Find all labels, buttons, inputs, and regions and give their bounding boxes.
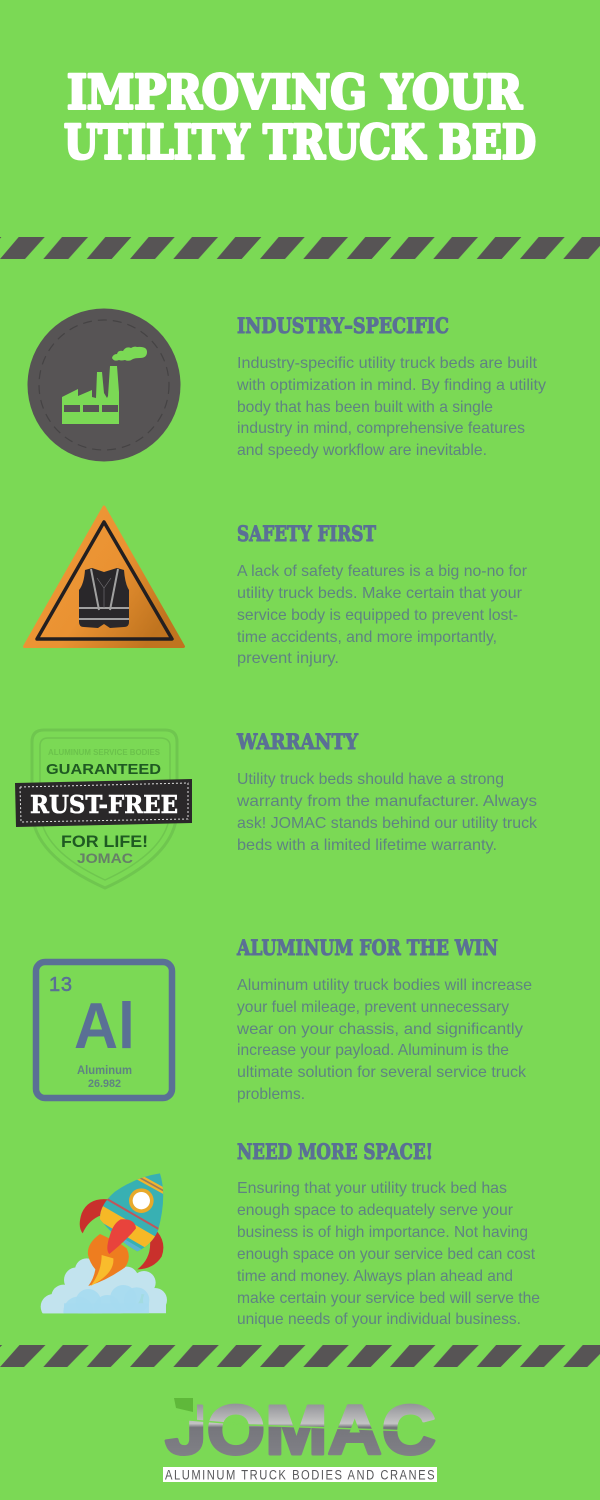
- icon: rust-free guarantee badge: RUST-FREE: [30, 790, 178, 819]
- icon: rust-free guarantee badge: [15, 730, 192, 888]
- heading: warranty: WARRANTY: [236, 729, 359, 754]
- icon: aluminum periodic table tile: Al: [74, 989, 135, 1062]
- text: safety first: time accidents, and more importantly,: [237, 629, 497, 646]
- logo: JOMAC: JOMAC: [165, 1391, 436, 1469]
- text: aluminum: increase your payload. Aluminum is the: [237, 1042, 509, 1059]
- text: warranty: Utility truck beds should have a strong: [237, 771, 504, 788]
- icon: safety vest warning triangle: [24, 507, 184, 646]
- icon: aluminum periodic table tile: [36, 962, 172, 1098]
- text: industry-specific: industry in mind, comprehensive features: [237, 420, 525, 437]
- text: aluminum: Aluminum utility truck bodies will increase: [237, 977, 532, 994]
- icon: rust-free guarantee badge: GUARANTEED: [46, 761, 161, 778]
- heading: industry-specific: INDUSTRY–SPECIFIC: [237, 313, 449, 338]
- text: warranty: beds with a limited lifetime warranty.: [237, 837, 497, 854]
- text: warranty: ask! JOMAC stands behind our utility truck: [237, 815, 538, 832]
- text: safety first: service body is equipped to prevent lost-: [237, 607, 518, 624]
- icon: aluminum periodic table tile: Aluminum: [77, 1063, 132, 1077]
- heading: aluminum for the win: ALUMINUM FOR THE WIN: [236, 935, 498, 960]
- title: [64, 66, 536, 170]
- text: safety first: prevent injury.: [237, 650, 339, 667]
- text: aluminum: your fuel mileage, prevent unnecessary: [237, 999, 509, 1016]
- text: safety first: utility truck beds. Make certain that your: [237, 585, 523, 602]
- text: industry-specific: [236, 355, 546, 459]
- icon: rocket: [41, 1173, 168, 1327]
- icon: aluminum periodic table tile: 13: [49, 974, 72, 996]
- text: need more space: enough space on your service bed can cost: [237, 1246, 536, 1263]
- text: need more space: [237, 1180, 540, 1328]
- logo: JOMAC: ALUMINUM TRUCK BODIES AND CRANES: [165, 1467, 435, 1483]
- text: aluminum: [236, 977, 532, 1103]
- text: industry-specific: with optimization in mind. By finding a utility: [236, 377, 546, 394]
- text: aluminum: wear on your chassis, and significantly: [236, 1021, 523, 1038]
- text: need more space: enough space to adequately serve your: [237, 1202, 514, 1219]
- text: industry-specific: body that has been built with a single: [237, 399, 493, 416]
- icon: rust-free guarantee badge: FOR LIFE!: [61, 832, 148, 851]
- text: need more space: time and money. Always plan ahead and: [237, 1268, 513, 1285]
- text: safety first: [237, 563, 528, 667]
- text: warranty: warranty from the manufacturer. Always: [236, 793, 537, 810]
- title: IMPROVING YOUR: [67, 66, 523, 120]
- icon: aluminum periodic table tile: 26.982: [88, 1078, 121, 1090]
- text: need more space: make certain your service bed will serve the: [237, 1290, 540, 1307]
- text: aluminum: problems.: [237, 1086, 305, 1103]
- icon: factory badge: [28, 308, 180, 462]
- icon: rust-free guarantee badge: ALUMINUM SERVICE BODIES: [48, 748, 161, 757]
- text: warranty: [236, 771, 538, 854]
- text: industry-specific: and speedy workflow are inevitable.: [237, 442, 487, 459]
- text: industry-specific: Industry-specific utility truck beds are built: [237, 355, 538, 372]
- text: aluminum: ultimate solution for several service truck: [237, 1064, 527, 1081]
- text: need more space: unique needs of your individual business.: [237, 1311, 521, 1328]
- rocket fins: [80, 1199, 163, 1269]
- heading: need more space: NEED MORE SPACE!: [237, 1139, 433, 1164]
- text: need more space: Ensuring that your utility truck bed has: [237, 1180, 507, 1197]
- text: need more space: business is of high importance. Not having: [237, 1224, 528, 1241]
- heading: safety first: SAFETY FIRST: [237, 521, 376, 546]
- text: safety first: A lack of safety features is a big no-no for: [237, 563, 528, 580]
- rocket body: [100, 1173, 164, 1252]
- icon: rust-free guarantee badge: JOMAC: [77, 850, 133, 866]
